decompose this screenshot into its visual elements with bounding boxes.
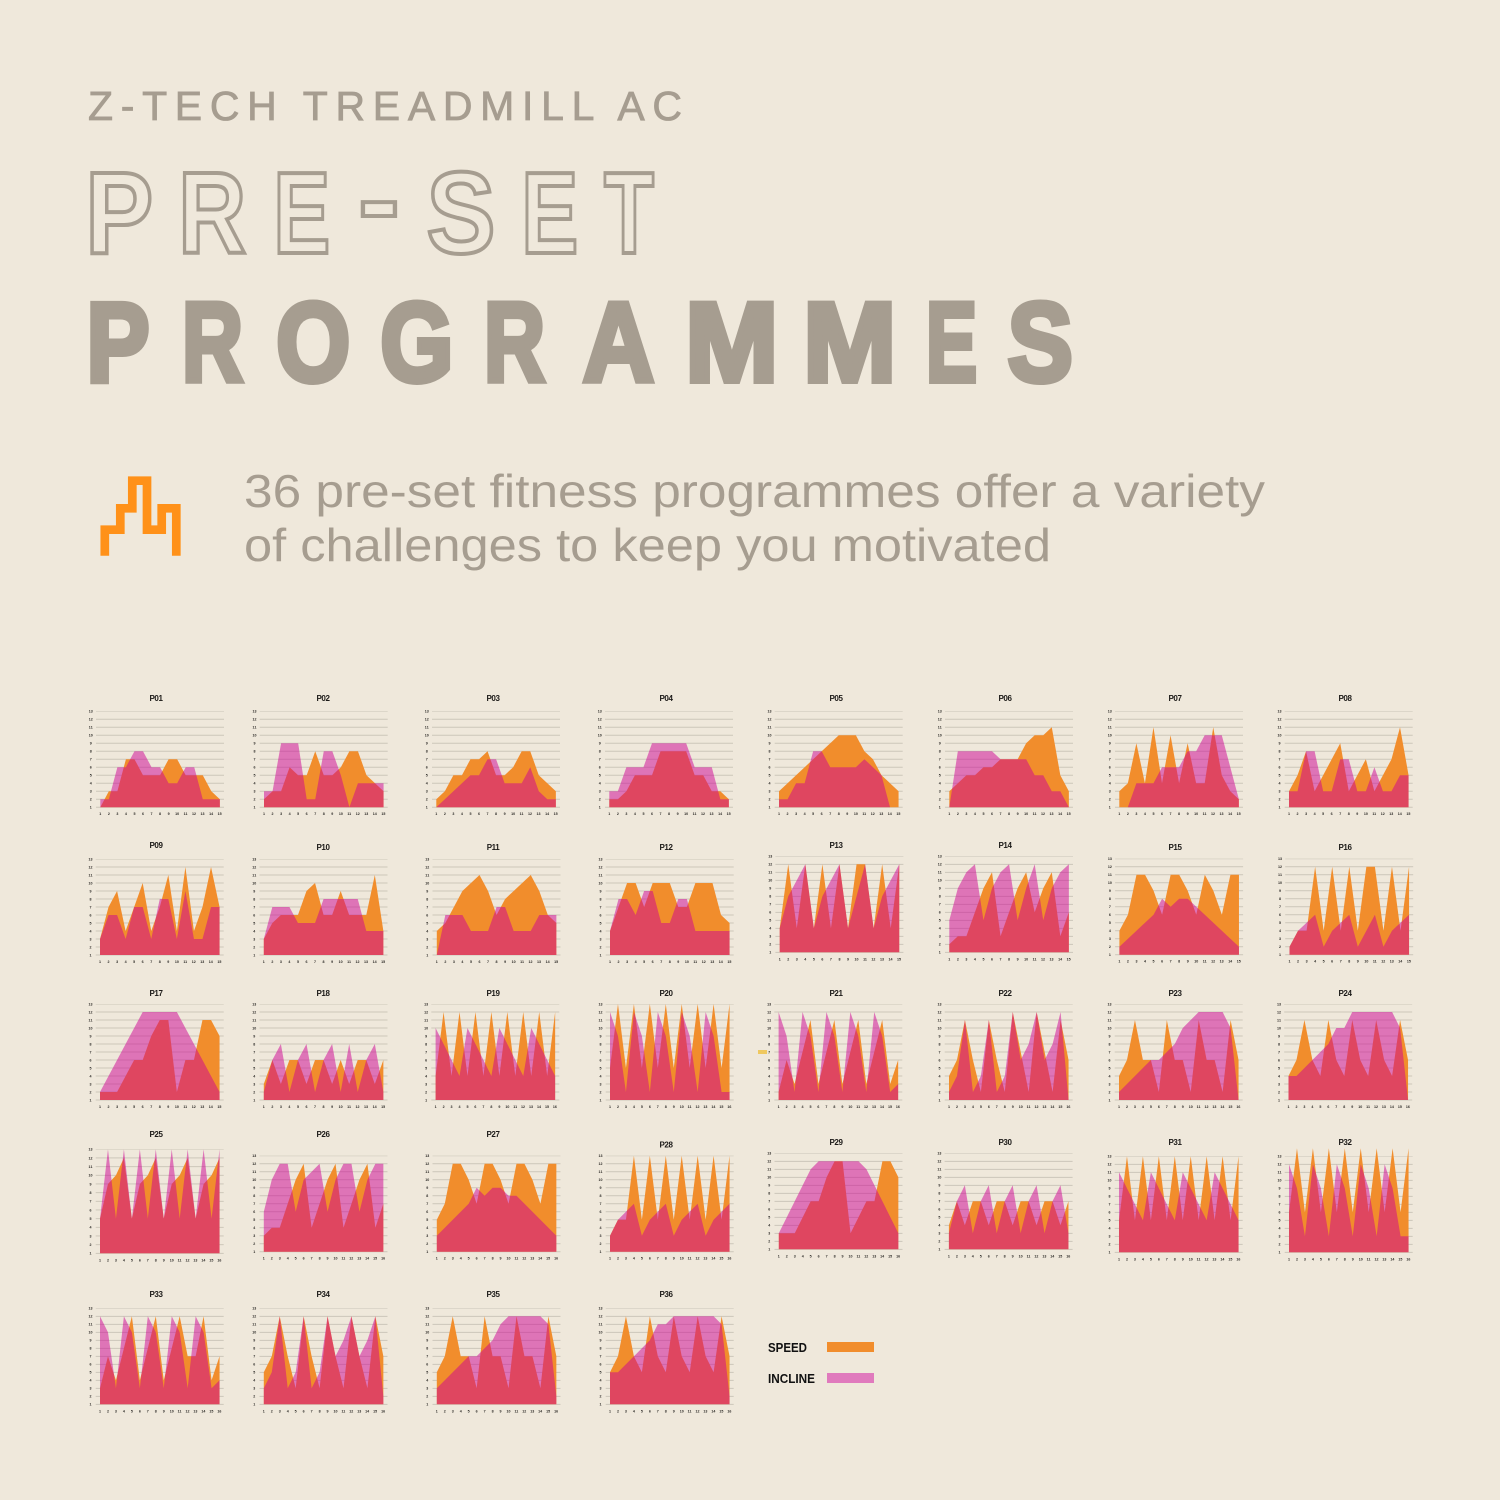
chart: P13: P13 (829, 841, 843, 850)
chart: P11: 13121110987654321 (425, 857, 429, 957)
title: PROGRAMMES solid: R (182, 280, 243, 405)
chart: P11: P11 (487, 843, 500, 852)
chart: P18 (252, 989, 388, 1109)
chart: P04: 13121110987654321 (598, 710, 602, 810)
chart: P20: P20 (659, 989, 673, 998)
chart: P22 (938, 989, 1073, 1109)
chart: P34: 13121110987654321 (252, 1307, 256, 1407)
chart: P01 (89, 694, 224, 816)
chart: P05 (768, 694, 903, 816)
chart: P18: P18 (316, 989, 330, 998)
chart: P20: 13121110987654321 (598, 1002, 602, 1102)
chart: P22: 1 2 3 4 5 6 7 8 9 10 11 12 13 14 15 16 (948, 1105, 1070, 1109)
chart: P31: P31 (1168, 1138, 1182, 1147)
chart: P28: P28 (659, 1141, 673, 1150)
chart: P14: 1 2 3 4 5 6 7 8 9 10 11 12 13 14 15 (948, 957, 1071, 961)
chart: P27 (425, 1130, 560, 1261)
chart: P10: P10 (316, 843, 330, 852)
title: PRE-SET outlined: - (358, 134, 400, 264)
chart: P09 (88, 841, 224, 964)
chart: P10: 13121110987654321 (252, 857, 256, 957)
chart: P29 (767, 1138, 902, 1258)
chart: P28: 13121110987654321 (598, 1154, 602, 1254)
chart: P17: P17 (149, 989, 163, 998)
chart: P32 (1278, 1138, 1413, 1261)
chart: P19: 1 2 3 4 5 6 7 8 9 10 11 12 13 14 15 16 (435, 1105, 557, 1109)
chart: P09: P09 (149, 841, 163, 850)
chart: P26: 13121110987654321 (252, 1154, 256, 1254)
chart: P02: 1 2 3 4 5 6 7 8 9 10 11 12 13 14 15 (263, 812, 385, 816)
chart: P22: 13121110987654321 (938, 1002, 942, 1102)
chart: P07: 13121110987654321 (1108, 710, 1112, 810)
title: PRE-SET outlined: E (521, 148, 578, 278)
chart: P35: 1 2 3 4 5 6 7 8 9 10 11 12 13 14 15 16 (436, 1409, 558, 1413)
chart: P19: 13121110987654321 (424, 1002, 428, 1102)
chart: P30: 13121110987654321 (937, 1152, 941, 1252)
chart: P32: 13121110987654321 (1278, 1155, 1282, 1255)
chart: P01: P01 (149, 694, 163, 703)
chart: P07 (1108, 694, 1243, 816)
eyebrow heading: Z-TECH TREADMILL AC (88, 83, 682, 129)
chart: P12 (598, 843, 734, 964)
chart: P27: 13121110987654321 (425, 1154, 429, 1254)
chart: P15: 1 2 3 4 5 6 7 8 9 10 11 12 13 14 15 (1118, 960, 1241, 964)
chart: P21 (767, 989, 902, 1109)
chart: P15: 13121110987654321 (1108, 857, 1112, 957)
chart: P11: 1 2 3 4 5 6 7 8 9 10 11 12 13 14 15 (436, 960, 558, 964)
title: PROGRAMMES solid: M (803, 280, 896, 405)
chart: P26: P26 (316, 1130, 330, 1139)
chart: P21: P21 (829, 989, 843, 998)
chart: P35 (425, 1290, 560, 1413)
chart: P10 (252, 843, 388, 964)
chart: P32: 1 2 3 4 5 6 7 8 9 10 11 12 13 14 15 16 (1288, 1257, 1410, 1261)
chart: P30: P30 (998, 1138, 1012, 1147)
chart: P15: P15 (1168, 843, 1182, 852)
chart: P12: 1 2 3 4 5 6 7 8 9 10 11 12 13 14 15 (609, 960, 731, 964)
chart: P34 (252, 1290, 388, 1413)
description text: 36 pre-set fitness programmes offer a variety (244, 465, 1265, 517)
chart: P08: 1 2 3 4 5 6 7 8 9 10 11 12 13 14 15 (1288, 812, 1410, 816)
chart: P33: 1 2 3 4 5 6 7 8 9 10 11 12 13 14 15 16 (99, 1409, 221, 1413)
chart: P05: 1 2 3 4 5 6 7 8 9 10 11 12 13 14 15 (778, 812, 900, 816)
chart: P31: 13121110987654321 (1108, 1155, 1112, 1255)
icon: stepped programme profile (105, 481, 176, 556)
chart: P03: P03 (486, 694, 500, 703)
chart: P10: 1 2 3 4 5 6 7 8 9 10 11 12 13 14 15 (263, 960, 385, 964)
chart: P35: P35 (486, 1290, 500, 1299)
title: PROGRAMMES solid: A (583, 280, 654, 405)
chart: P36 (598, 1290, 734, 1413)
chart: P17: 1 2 3 4 5 6 7 8 9 10 11 12 13 14 15 (99, 1105, 221, 1109)
chart: P18: 1 2 3 4 5 6 7 8 9 10 11 12 13 14 15 (263, 1105, 385, 1109)
title: PROGRAMMES solid: M (685, 280, 778, 405)
chart: P04: P04 (659, 694, 673, 703)
chart: P23 (1108, 989, 1243, 1109)
chart: P26 (252, 1130, 388, 1261)
chart: P33: P33 (149, 1290, 163, 1299)
chart: P30: 1 2 3 4 5 6 7 8 9 10 11 12 13 14 15 16 (948, 1254, 1070, 1258)
chart: P14: P14 (998, 841, 1012, 850)
chart: P17 (88, 989, 224, 1109)
chart: P19 (424, 989, 559, 1109)
yellow mark (758, 1050, 767, 1054)
chart: P26: 1 2 3 4 5 6 7 8 9 10 11 12 13 14 15 16 (263, 1257, 385, 1261)
chart: P30 (937, 1138, 1073, 1258)
title: PROGRAMMES solid: S (1008, 280, 1073, 405)
chart: P21: 1 2 3 4 5 6 7 8 9 10 11 12 13 14 15 16 (778, 1105, 900, 1109)
chart: P12: 13121110987654321 (598, 857, 602, 957)
chart: P16: P16 (1338, 843, 1352, 852)
chart: P23: 1 2 3 4 5 6 7 8 9 10 11 12 13 14 15 16 (1118, 1105, 1240, 1109)
chart: P06: 13121110987654321 (938, 710, 942, 810)
chart: P14: 13121110987654321 (938, 855, 942, 955)
chart: P12: P12 (659, 843, 673, 852)
title: PRE-SET outlined: R (178, 148, 246, 278)
chart: P32: P32 (1338, 1138, 1352, 1147)
chart: P01: 13121110987654321 (89, 710, 93, 810)
chart: P02 (252, 694, 388, 816)
chart: P35: 13121110987654321 (425, 1307, 429, 1407)
chart: P13: 1 2 3 4 5 6 7 8 9 10 11 12 13 14 15 (779, 957, 901, 961)
title: PROGRAMMES solid: G (380, 280, 453, 405)
chart: P06: 1 2 3 4 5 6 7 8 9 10 11 12 13 14 15 (948, 812, 1071, 816)
chart: P03: 1 2 3 4 5 6 7 8 9 10 11 12 13 14 15 (435, 812, 558, 816)
description text: of challenges to keep you motivated (244, 519, 1051, 571)
title: PRE-SET outlined: P (85, 148, 153, 278)
title: PROGRAMMES solid (86, 280, 1073, 405)
chart: P25 (88, 1130, 224, 1262)
chart: P34: 1 2 3 4 5 6 7 8 9 10 11 12 13 14 15 16 (263, 1409, 385, 1413)
legend: INCLINE (768, 1372, 815, 1386)
chart: P31: 1 2 3 4 5 6 7 8 9 10 11 12 13 14 15 16 (1118, 1257, 1240, 1261)
legend: SPEED (768, 1341, 807, 1355)
title: PROGRAMMES solid: R (484, 280, 545, 405)
chart: P08: 13121110987654321 (1278, 710, 1282, 810)
chart: P24: P24 (1338, 989, 1352, 998)
chart: P24: 1 2 3 4 5 6 7 8 9 10 11 12 13 14 15 16 (1288, 1105, 1410, 1109)
chart: P24 (1277, 989, 1412, 1109)
title: PRE-SET outlined (85, 134, 654, 278)
chart: P20: 1 2 3 4 5 6 7 8 9 10 11 12 13 14 15 16 (609, 1105, 731, 1109)
chart: P03 (425, 694, 560, 816)
chart: P17: 13121110987654321 (88, 1002, 92, 1102)
chart: P28 (598, 1141, 734, 1261)
chart: P25: P25 (149, 1130, 163, 1139)
chart: P23: 13121110987654321 (1108, 1002, 1112, 1102)
chart: P28: 1 2 3 4 5 6 7 8 9 10 11 12 13 14 15 16 (609, 1257, 731, 1261)
legend (768, 1341, 874, 1386)
chart: P36: P36 (659, 1290, 673, 1299)
chart: P31 (1108, 1138, 1243, 1261)
chart: P29: P29 (829, 1138, 843, 1147)
chart: P23: P23 (1168, 989, 1182, 998)
title: PROGRAMMES solid: P (86, 280, 150, 405)
chart: P09: 13121110987654321 (88, 857, 92, 957)
description text (244, 465, 1265, 571)
chart: P21: 13121110987654321 (767, 1002, 771, 1102)
chart: P25: 13121110987654321 (88, 1148, 92, 1256)
chart: P04 (598, 694, 733, 816)
chart: P13: 13121110987654321 (768, 855, 772, 955)
chart: P25: 1 2 3 4 5 6 7 8 9 10 11 12 13 14 15 16 (99, 1258, 221, 1262)
chart: P19: P19 (486, 989, 500, 998)
chart: P04: 1 2 3 4 5 6 7 8 9 10 11 12 13 14 15 (608, 812, 731, 816)
chart: P16: 1 2 3 4 5 6 7 8 9 10 11 12 13 14 15 (1288, 960, 1411, 964)
chart: P27: P27 (486, 1130, 500, 1139)
chart: P08: P08 (1338, 694, 1352, 703)
chart: P20 (598, 989, 734, 1109)
chart: P03: 13121110987654321 (425, 710, 429, 810)
title: PROGRAMMES solid: E (926, 280, 977, 405)
chart: P07: 1 2 3 4 5 6 7 8 9 10 11 12 13 14 15 (1118, 812, 1241, 816)
title: PRE-SET outlined: T (604, 148, 654, 278)
title: PROGRAMMES solid: O (276, 280, 350, 405)
chart: P09: 1 2 3 4 5 6 7 8 9 10 11 12 13 14 15 (99, 960, 221, 964)
chart: P36: 1 2 3 4 5 6 7 8 9 10 11 12 13 14 15 16 (609, 1409, 731, 1413)
chart: P02: 13121110987654321 (252, 710, 256, 810)
chart: P16 (1278, 843, 1413, 964)
chart: P27: 1 2 3 4 5 6 7 8 9 10 11 12 13 14 15 16 (436, 1257, 558, 1261)
chart: P22: P22 (998, 989, 1012, 998)
chart: P24: 13121110987654321 (1277, 1002, 1281, 1102)
chart: P16: 13121110987654321 (1278, 857, 1282, 957)
chart: P29: 1 2 3 4 5 6 7 8 9 10 11 12 13 14 15 16 (778, 1254, 900, 1258)
chart: P33: 13121110987654321 (88, 1307, 92, 1407)
chart: P29: 13121110987654321 (767, 1152, 771, 1252)
chart: P05: 13121110987654321 (768, 710, 772, 810)
chart: P06: P06 (998, 694, 1012, 703)
chart: P11 (425, 843, 560, 964)
title: PRE-SET outlined: E (273, 148, 330, 278)
chart: P01: 1 2 3 4 5 6 7 8 9 10 11 12 13 14 15 (99, 812, 222, 816)
chart: P33 (88, 1290, 224, 1413)
chart: P14 (938, 841, 1073, 961)
title: PRE-SET outlined: S (426, 148, 496, 278)
chart: P13 (768, 841, 903, 961)
chart: P05: P05 (829, 694, 843, 703)
chart: P06 (938, 694, 1073, 816)
chart: P02: P02 (316, 694, 330, 703)
chart: P15 (1108, 843, 1243, 964)
chart: P08 (1278, 694, 1413, 816)
chart: P18: 13121110987654321 (252, 1002, 256, 1102)
chart: P36: 13121110987654321 (598, 1307, 602, 1407)
chart: P07: P07 (1168, 694, 1182, 703)
chart: P34: P34 (316, 1290, 330, 1299)
